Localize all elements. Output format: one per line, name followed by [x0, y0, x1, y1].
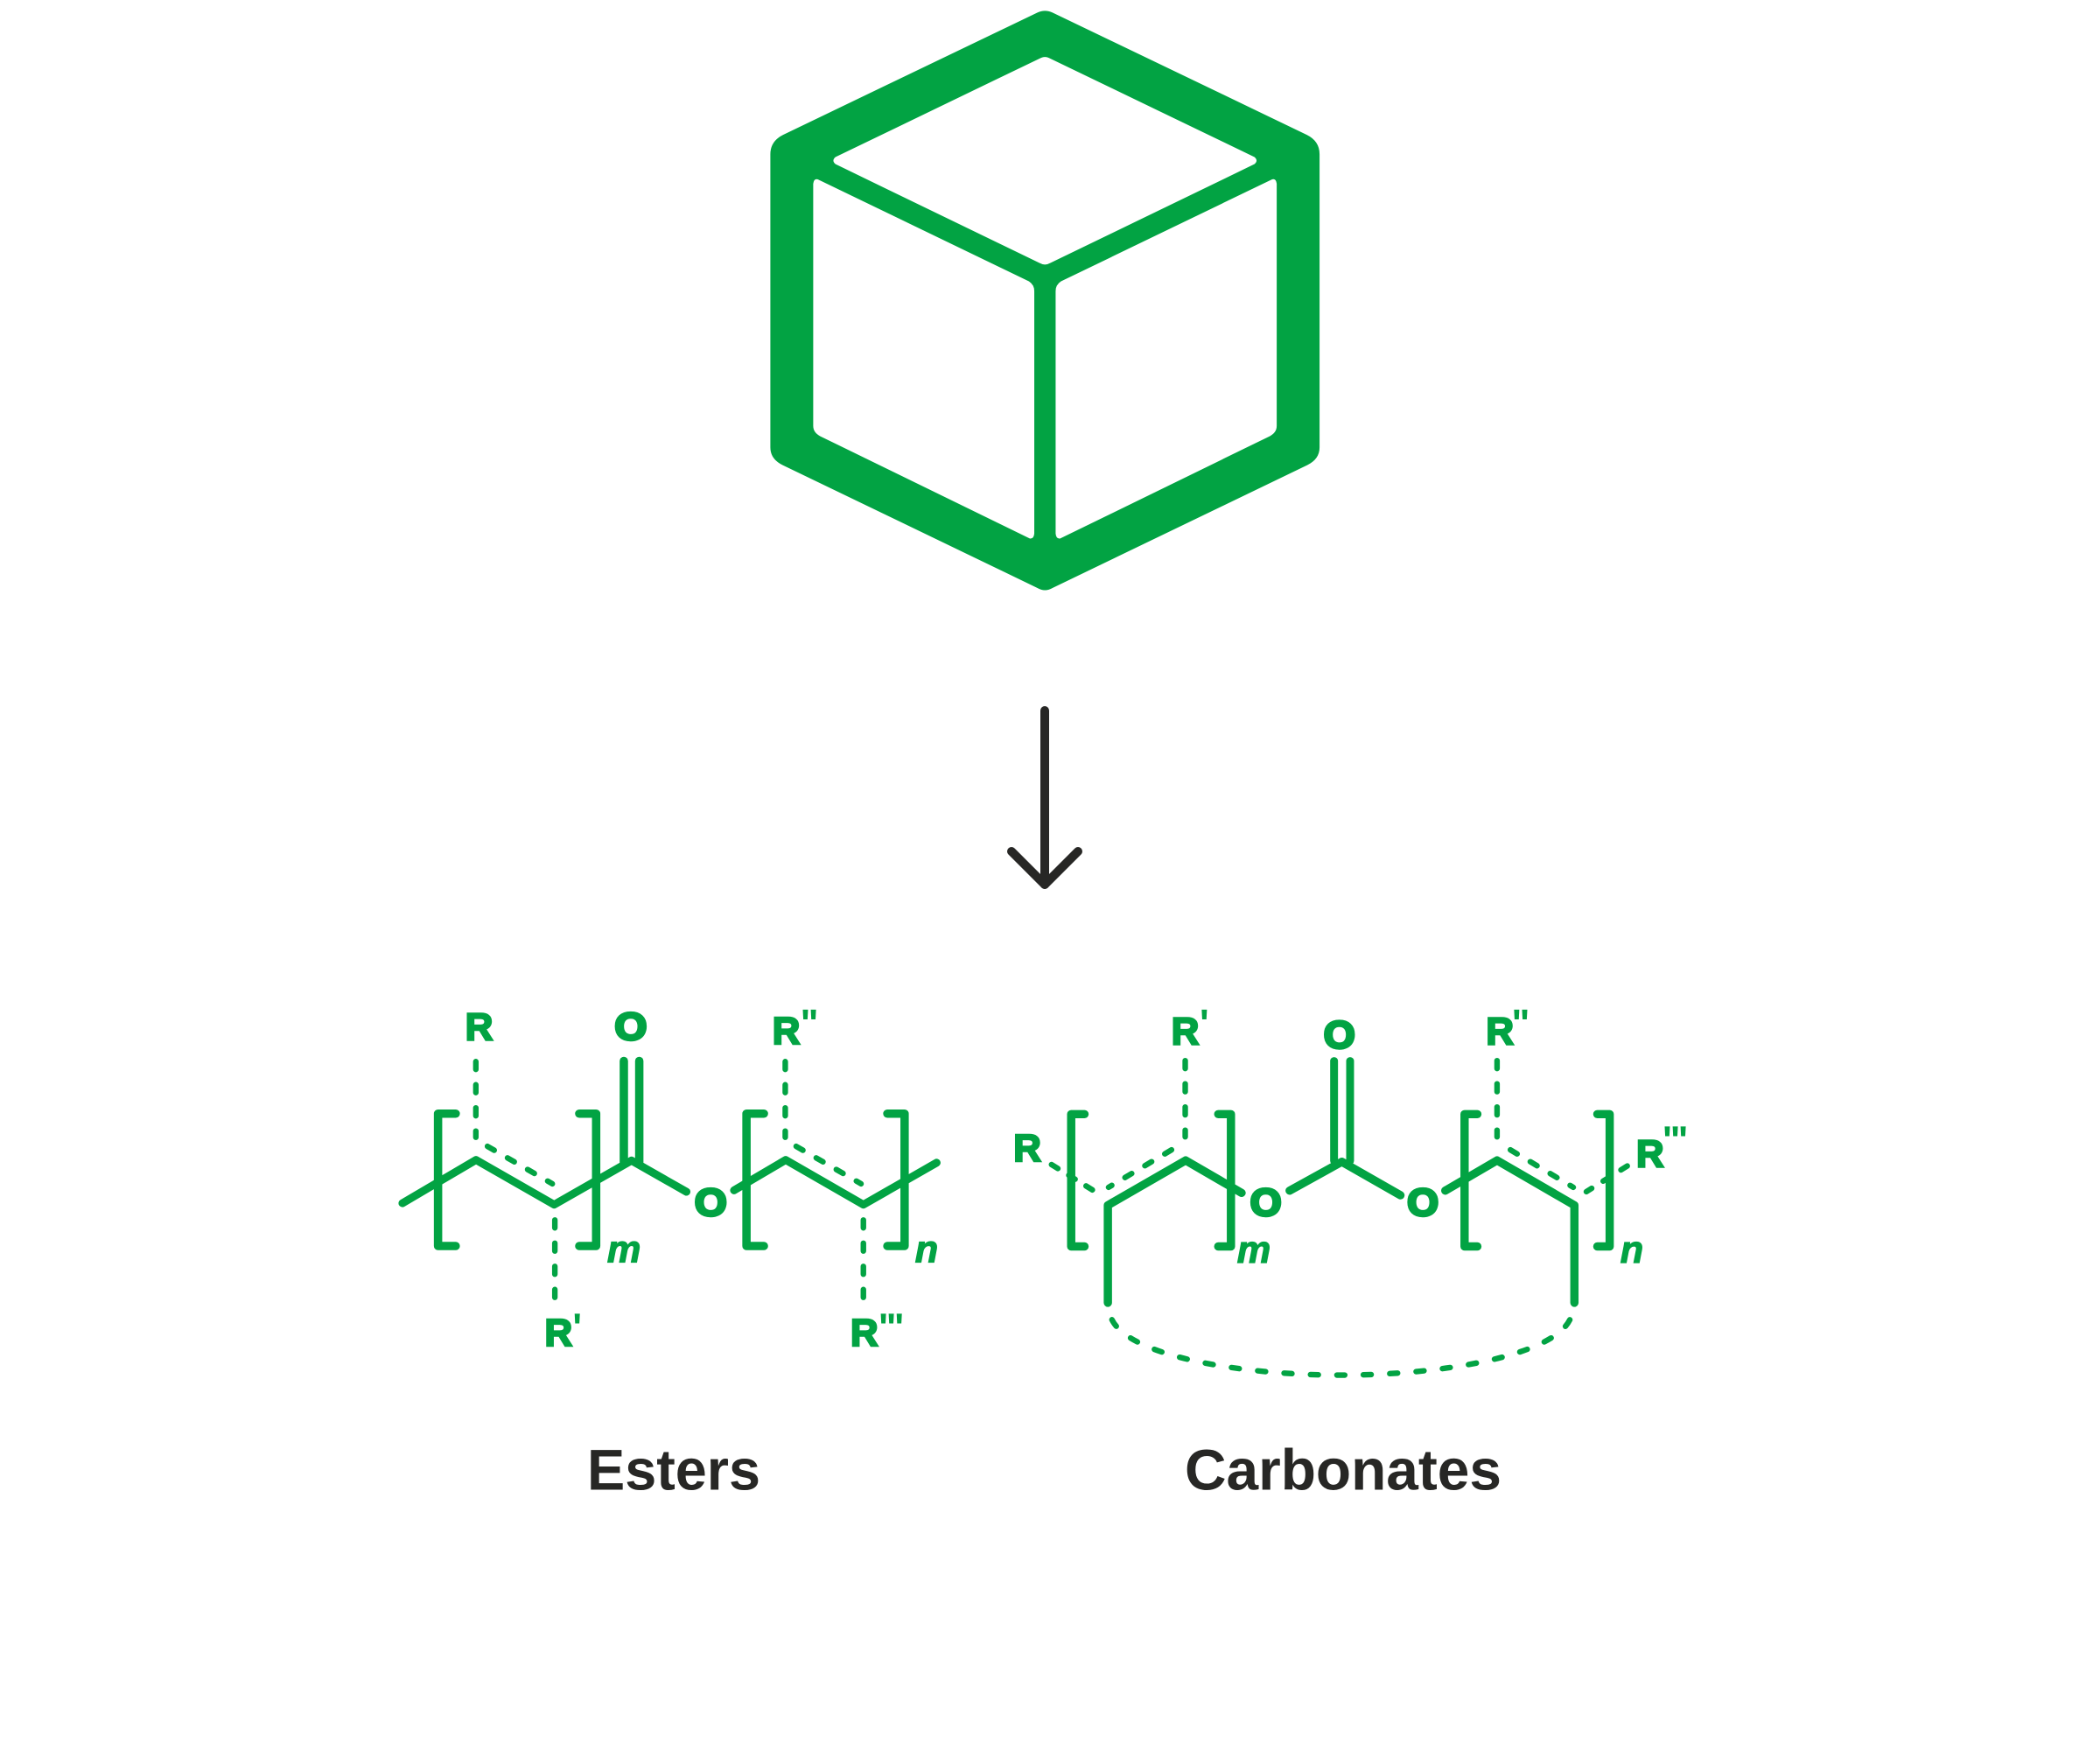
arrow: reaction pointing down: [1012, 710, 1078, 885]
ester atom labels: '': [801, 1002, 816, 1046]
caption: Carbonates: Carbonates: [1185, 1437, 1502, 1502]
ester atom labels: R: [544, 1312, 572, 1354]
carbonate atom labels: n: [1620, 1229, 1643, 1271]
carbonate atom labels: R: [1486, 1011, 1514, 1054]
carbonate carbonyl double bond: [1334, 1061, 1350, 1161]
caption: Esters: Esters: [587, 1437, 760, 1502]
carbonate atom labels: m: [1237, 1229, 1270, 1271]
ester atom labels: m: [607, 1229, 640, 1271]
carbonate atom labels: ': [1200, 1001, 1208, 1045]
chemical structure: carbonates: [1013, 1001, 1686, 1376]
carbonate atom labels: R: [1636, 1132, 1664, 1175]
ester atom labels: O: [615, 1005, 647, 1048]
chemical structure: esters: [402, 1002, 938, 1354]
carbonate atom labels: O: [1324, 1012, 1355, 1056]
ester atom labels: R: [850, 1312, 878, 1354]
carbonate atom labels: R: [1172, 1011, 1199, 1054]
carbonate atom labels: R: [1013, 1127, 1041, 1170]
ester backbone bonds: [402, 1160, 936, 1205]
carbonate brackets: [1071, 1114, 1610, 1247]
ester carbonyl double bond: [624, 1061, 640, 1162]
ester atom labels: O: [695, 1180, 727, 1223]
carbonate backbone bonds: [1108, 1160, 1574, 1303]
carbonate atom labels: O: [1407, 1180, 1438, 1224]
ester atom labels: [466, 1002, 938, 1354]
ester atom labels: R: [466, 1006, 493, 1049]
carbonate atom labels: [1013, 1001, 1686, 1271]
carbonate atom labels: O: [1250, 1180, 1282, 1224]
ester atom labels: R: [773, 1010, 800, 1053]
carbonate atom labels: '': [1512, 1001, 1528, 1045]
ester atom labels: ''': [878, 1306, 902, 1349]
carbonate dashed bonds: [1052, 1060, 1628, 1376]
ester atom labels: ': [572, 1306, 580, 1349]
carbonate atom labels: ''': [1662, 1118, 1686, 1162]
icon: green cube: [770, 10, 1320, 590]
ester dashed bonds: [476, 1061, 864, 1298]
ester brackets: [438, 1114, 905, 1246]
ester atom labels: n: [915, 1229, 938, 1271]
